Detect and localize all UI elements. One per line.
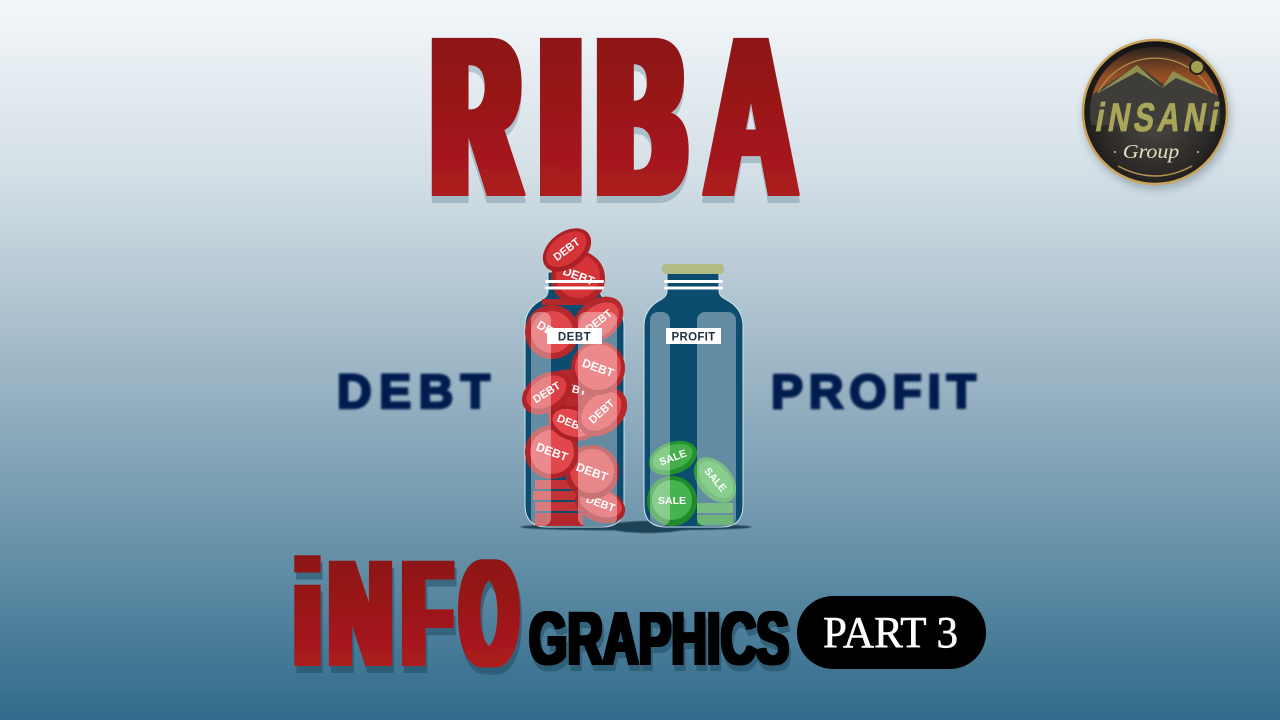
coin: sale: SALE [701,465,729,495]
title: RIBA [434,0,796,244]
label: PROFIT: PROFIT [771,366,976,419]
coin edge [542,299,590,305]
heading: GRAPHICS: GRAPHICS [529,597,789,680]
glass highlights [650,312,736,526]
coin at neck: DEBT [561,264,597,289]
coin [565,445,619,499]
coin [525,305,579,359]
coin: sale [685,449,745,511]
coin: DEBT [587,397,617,426]
coin stack [697,503,733,525]
coin: DEBT [556,379,588,399]
jar label [666,328,721,344]
heading: iNFO: i [293,529,322,697]
coin: DEBT [580,356,616,380]
jar label [547,328,602,344]
badge: PART 3 [797,596,986,669]
neck rings [664,280,723,290]
coin: sale [647,476,697,526]
coin at neck [551,251,605,305]
coin: sale [644,434,702,482]
coin stack [533,480,583,526]
coin [567,378,637,446]
logo wordmark: iNSANi [1092,95,1223,140]
coin: DEBT [584,307,615,336]
logo dots [1114,151,1199,153]
coin [514,363,580,423]
coin: DEBT [574,460,610,484]
label: DEBT: DEBT [337,366,490,419]
jar shadow [520,521,752,533]
logo script: Group [1123,140,1179,163]
coin: DEBT [555,413,588,435]
logo: Insani Group [1083,40,1231,190]
logo lower arc [1118,166,1192,176]
logo sky and mountains [1090,47,1220,125]
coin [525,425,579,479]
neck rings [545,280,604,290]
badge: PART 3: PART 3 [823,608,958,657]
coin: sale: SALE [658,448,688,468]
coin on top: DEBT [551,236,583,264]
jar label: DEBT [558,332,591,344]
heading: iNFO [293,529,517,697]
text: O [461,529,517,697]
jar body [644,272,743,527]
debt jar [514,219,637,530]
coin [542,396,602,448]
coin: sale: SALE [658,495,686,507]
lid [662,264,724,274]
coin: DEBT [534,318,570,347]
logo upper arc [1098,58,1212,93]
jar label: PROFIT [672,332,715,344]
coin: DEBT [534,440,570,464]
logo sun [1190,60,1204,74]
coin [564,287,632,353]
heading: iNFO: F [402,529,452,697]
heading: iNFO: N [329,529,392,697]
jar body [525,272,624,527]
coin: DEBT [531,380,563,406]
coin: DEBT [584,493,617,515]
glass highlights [531,312,617,526]
coin [571,341,625,395]
coin [570,480,630,530]
profit jar [644,264,745,527]
coin on top [535,219,599,281]
coin [542,364,602,412]
